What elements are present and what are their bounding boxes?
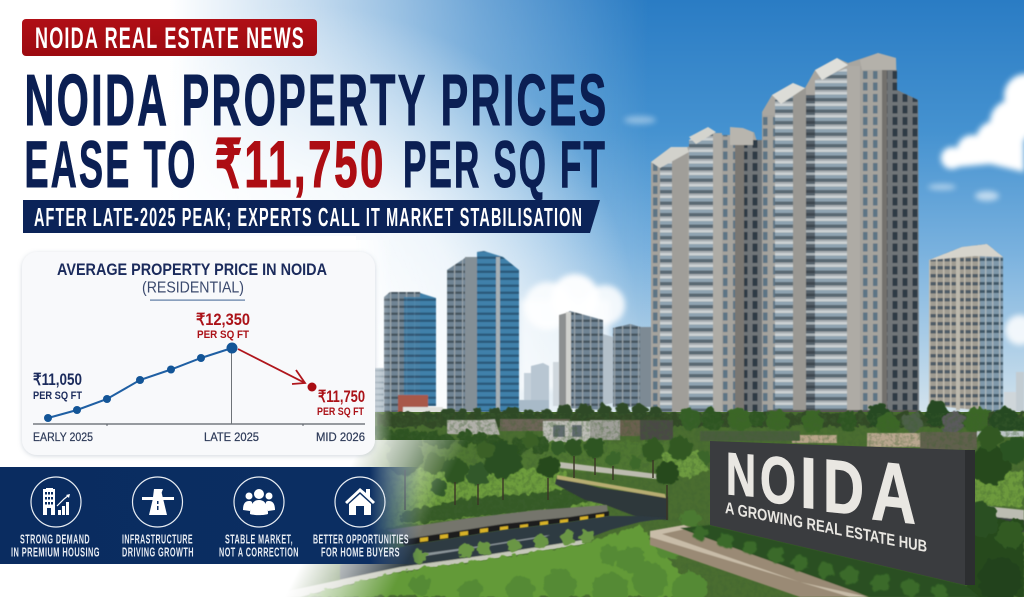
label: current price: ₹11,750 [318, 388, 365, 406]
driver: better opportunities: BETTER OPPORTUNITIES [313, 532, 409, 546]
lower road [260, 516, 668, 597]
axis labels: EARLY 2025 [33, 432, 93, 444]
tag: news label: NOIDA REAL ESTATE NEWS [35, 22, 305, 55]
driver: infrastructure [122, 477, 194, 560]
sign planter wall and hedge [650, 525, 980, 597]
driver: strong demand: STRONG DEMAND [20, 532, 90, 546]
lower lawn [300, 525, 700, 597]
green ground base [250, 412, 1024, 597]
mid-ground lawn and trees [370, 424, 1024, 532]
tower: right standalone [929, 244, 1003, 413]
sign tagline: A GROWING REAL ESTATE HUB [725, 498, 927, 556]
driver: better opportunities: FOR HOME BUYERS [321, 544, 400, 560]
upper road [555, 462, 1024, 532]
white fade over left of photo [240, 240, 480, 597]
tower pair left [651, 127, 762, 412]
title: EASE TO [24, 127, 198, 201]
axis labels: MID 2026 [316, 432, 365, 444]
sign letters: NOIDA [726, 440, 916, 542]
NOIDA sign monument [650, 440, 980, 597]
mid-distance glass towers [384, 251, 652, 417]
driver: strong demand [11, 477, 100, 560]
tower pair right (tallest) [762, 53, 919, 424]
driver: strong demand: IN PREMIUM HOUSING [11, 544, 100, 560]
label: early 2025 price [33, 371, 82, 402]
subtitle ribbon: AFTER LATE-2025 PEAK; EXPERTS CALL IT MARKET STABILISATION [34, 204, 583, 232]
tower: right cluster [559, 311, 652, 410]
axis labels [33, 432, 365, 444]
driver: better opportunities [313, 477, 409, 560]
sign letters: NOIDA: O [760, 442, 796, 520]
arrow: price decline [238, 349, 305, 384]
tag: news label [22, 19, 317, 56]
horizon tree line [376, 401, 1024, 437]
label: peak price: ₹12,350 [196, 311, 250, 329]
sign slab [710, 441, 965, 585]
tower: left glass [384, 292, 443, 417]
label: current price [317, 388, 365, 418]
label: early 2025 price: ₹11,050 [33, 371, 82, 389]
driver: stable market: NOT A CORRECTION [219, 544, 299, 560]
chart title: (RESIDENTIAL) [142, 280, 244, 296]
label: peak price: PER SQ FT [197, 329, 249, 341]
label: peak price [196, 311, 250, 341]
driver: stable market [219, 477, 299, 560]
title: ₹11,750 [215, 127, 386, 201]
chart title [57, 261, 327, 301]
lower shrub mass [410, 502, 1024, 597]
foliage texture [250, 413, 1024, 597]
panel: average price chart [22, 252, 375, 455]
sign letters: NOIDA: A [871, 443, 916, 542]
icon: building with growth bars [43, 488, 70, 515]
distant hazy towers [375, 330, 1024, 414]
foreground twin residential towers [651, 53, 1003, 424]
panel: key drivers band [0, 467, 420, 564]
axis labels: LATE 2025 [204, 432, 259, 444]
line chart: price trend [33, 342, 365, 426]
title [24, 60, 608, 201]
foreground trees [387, 426, 1024, 495]
tower: central tall glass [447, 251, 519, 412]
driver: infrastructure: DRIVING GROWTH [122, 544, 194, 560]
icon: house [345, 488, 375, 515]
icon: overpass road [142, 489, 174, 515]
driver: infrastructure: INFRASTRUCTURE [122, 532, 193, 546]
tree trunks [405, 456, 667, 520]
label: current price: PER SQ FT [317, 406, 364, 418]
chart title: AVERAGE PROPERTY PRICE IN NOIDA [57, 261, 327, 279]
ground: trees, low buildings and roads [250, 401, 1024, 597]
clouds [624, 74, 1024, 345]
roadside shrubs [413, 530, 594, 564]
title: NOIDA PROPERTY PRICES [24, 60, 608, 141]
median with kerb [387, 505, 609, 546]
title: PER SQ FT [403, 127, 607, 201]
sign letters: NOIDA: N [726, 440, 756, 510]
mid cloud [520, 274, 625, 390]
sign letters: NOIDA: D [823, 443, 864, 531]
label: early 2025 price: PER SQ FT [33, 390, 82, 402]
driver: stable market: STABLE MARKET, [225, 532, 293, 546]
icon: people group [243, 489, 275, 515]
low-rise buildings [447, 419, 1024, 450]
subtitle ribbon [23, 200, 600, 233]
sign letters: NOIDA: I [800, 443, 817, 525]
